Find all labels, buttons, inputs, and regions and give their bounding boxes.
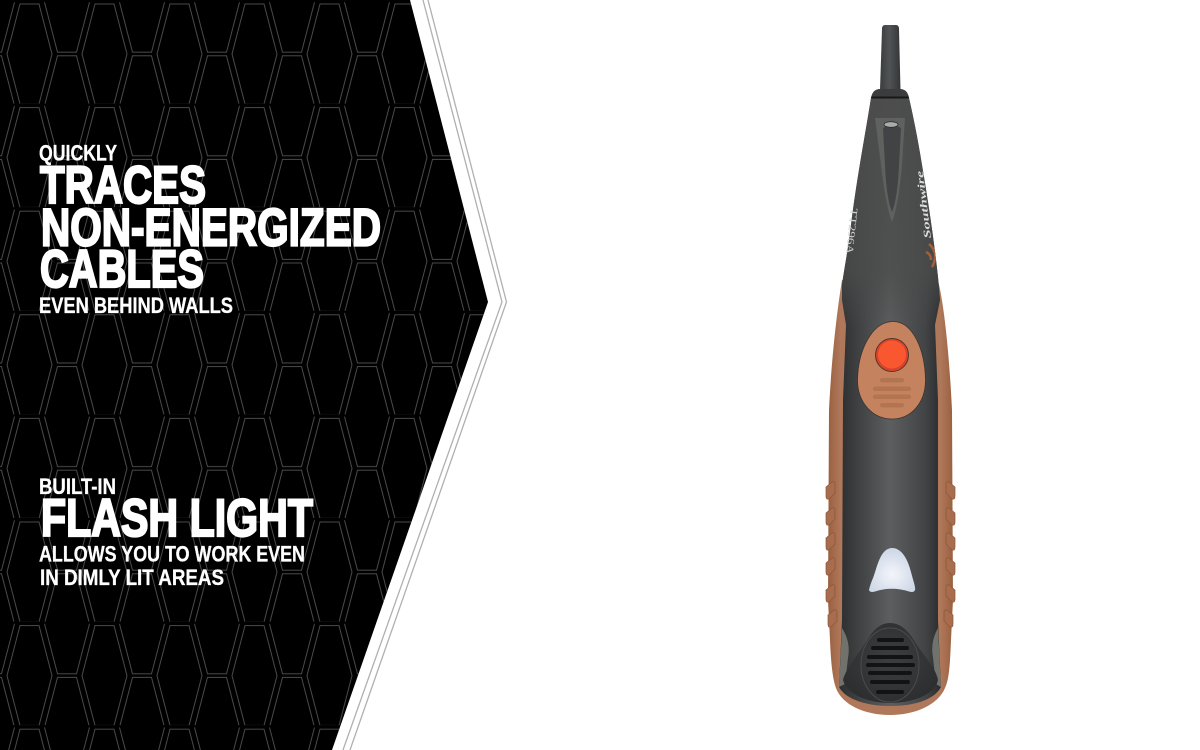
text block: traces cables: NON-ENERGIZED: [41, 198, 381, 258]
speaker grille: [843, 623, 938, 703]
probe tip: [880, 25, 900, 90]
flashlight LED: [869, 548, 915, 592]
text block: flash light: [39, 474, 313, 590]
text block: flash light: ALLOWS YOU TO WORK EVEN: [39, 542, 305, 566]
text block: traces cables: TRACES: [40, 156, 206, 215]
text block: traces cables: CABLES: [40, 240, 204, 299]
text block: flash light: FLASH LIGHT: [41, 489, 313, 548]
text block: traces cables: QUICKLY: [39, 140, 117, 166]
grey bumper strips beside speaker: [839, 628, 941, 687]
grey body shell: [839, 98, 941, 706]
groove with indicator lens: [875, 118, 905, 222]
trigger button housing: [858, 322, 926, 419]
brand name: Southwire: [915, 169, 934, 239]
model number: TT296A: [843, 208, 859, 256]
text block: flash light: BUILT-IN: [39, 474, 116, 499]
text block: traces cables: EVEN BEHIND WALLS: [39, 293, 233, 318]
text block: flash light: IN DIMLY LIT AREAS: [40, 565, 224, 590]
upper shell tone: [842, 98, 940, 308]
brand logo: [926, 244, 935, 267]
product: tone tracer probe: [826, 25, 955, 715]
chevron double outline: [343, 0, 506, 750]
infographic canvas: [0, 0, 956, 750]
collar: [871, 89, 909, 98]
brown rubber grip: [826, 280, 955, 715]
text block: traces cables: [39, 140, 381, 318]
panel: black chevron with hexagon pattern: [0, 0, 488, 750]
